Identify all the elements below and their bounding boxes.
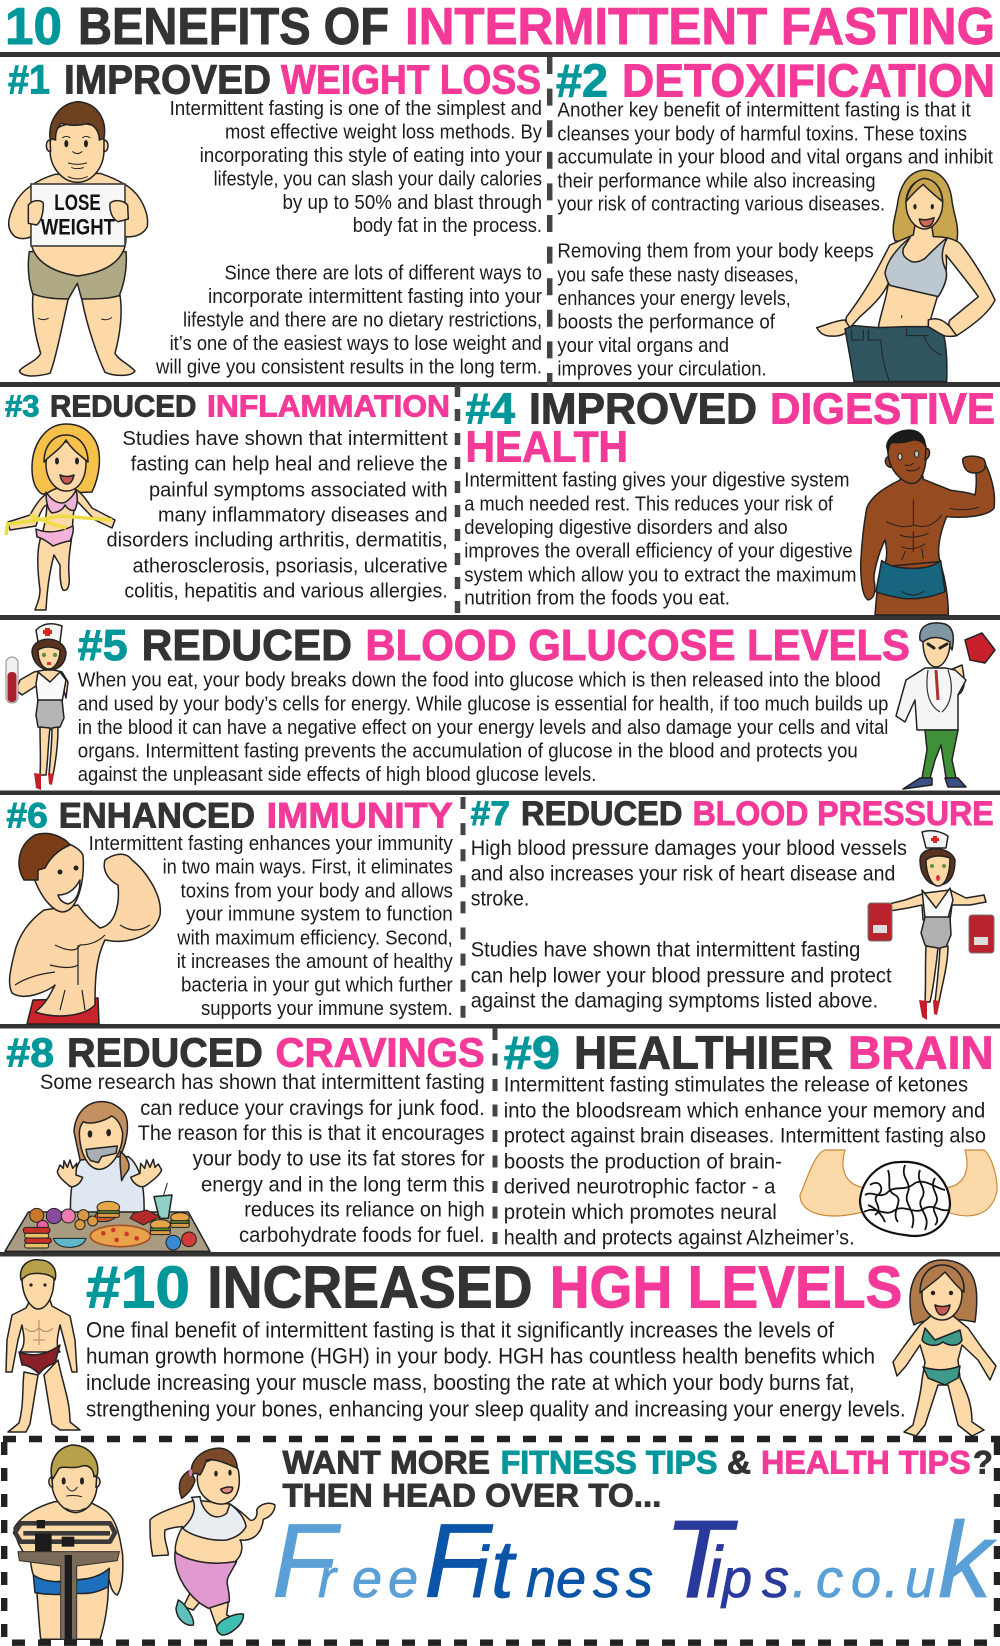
text block: #4 body: a much needed rest. This reduces your risk of: [464, 493, 833, 515]
section rules and dividers: [0, 52, 1000, 1256]
heading: #9: BRAIN: [848, 1026, 994, 1078]
text block: #1 body: lifestyle and there are no dietary restrictions,: [183, 310, 542, 332]
logo: FreeFitnessTips.co.uk: ree: [318, 1549, 418, 1609]
icon: man holding lose weight sign: [9, 102, 148, 376]
text block: #10 body: One final benefit of intermittent fasting is that it significantly increases the levels of: [86, 1317, 835, 1342]
heading: #1: #1: [8, 56, 50, 102]
panel: #9 healthier brain: [504, 1026, 997, 1249]
text block: #9 body: boosts the production of brain-: [504, 1150, 782, 1173]
text block: #8 body: can reduce your cravings for junk food.: [140, 1097, 485, 1120]
text block: #9 body: derived neurotrophic factor - a: [504, 1176, 776, 1199]
logo: FreeFitnessTips.co.uk: .co.u: [792, 1549, 935, 1609]
text block: #3 body: Studies have shown that intermittent: [122, 427, 448, 450]
heading: #1: IMPROVED: [64, 56, 271, 102]
heading: #7: #7: [471, 795, 510, 833]
icon: overweight woman jogging: [150, 1448, 275, 1635]
text block: #2 body: you safe these nasty diseases,: [557, 264, 798, 286]
heading: call to action: THEN HEAD OVER TO...: [282, 1478, 661, 1514]
logo: FreeFitnessTips.co.uk: ps: [720, 1549, 789, 1609]
heading: #3: [5, 389, 450, 424]
text block: #8 body: Some research has shown that intermittent fasting: [40, 1071, 485, 1094]
heading: #6: #6: [6, 796, 48, 835]
text block: #2 body: cleanses your body of harmful toxins. These toxins: [557, 123, 967, 145]
text block: #9 body: [504, 1074, 986, 1249]
text block: #3 body: many inflammatory diseases and: [158, 504, 448, 527]
text block: #8 body: energy and in the long term this: [201, 1173, 485, 1196]
text block: #1 body: Intermittent fasting is one of the simplest and: [170, 98, 542, 120]
heading: #9: HEALTHIER: [574, 1026, 833, 1078]
logo: FreeFitnessTips.co.uk: F: [424, 1503, 494, 1620]
text block: #3 body: colitis, hepatitis and various allergies.: [124, 580, 448, 603]
text block: #6 body: bacteria in your gut which further: [181, 974, 453, 996]
heading: #8: #8: [6, 1030, 54, 1076]
heading: #8: CRAVINGS: [276, 1030, 485, 1076]
text block: #2 body: Removing them from your body keeps: [557, 241, 874, 263]
text block: #7 body: Studies have shown that intermittent fasting: [471, 939, 860, 962]
text block: #8 body: carbohydrate foods for fuel.: [239, 1224, 485, 1247]
icon: woman in teal bikini: [893, 1260, 996, 1436]
text block: #10 body: include increasing your muscle mass, boosting the rate at which your body burns fat,: [86, 1370, 855, 1395]
logo: FreeFitnessTips.co.uk: k: [938, 1499, 997, 1620]
heading: #7: REDUCED: [521, 795, 682, 833]
heading: #5: #5: [78, 621, 128, 670]
title: [5, 0, 995, 56]
heading: #8: [6, 1030, 485, 1076]
icon: fit man in red briefs: [6, 1260, 80, 1432]
text block: #9 body: Intermittent fasting stimulates the release of ketones: [504, 1074, 968, 1097]
text block: #8 body: reduces its reliance on high: [244, 1199, 485, 1222]
heading: #1: WEIGHT LOSS: [281, 56, 541, 102]
heading: call to action: HEALTH TIPS: [761, 1444, 971, 1480]
heading: #4: DIGESTIVE: [770, 384, 995, 433]
icon: blonde woman measuring waist: [6, 424, 115, 610]
heading: #9: #9: [504, 1026, 560, 1078]
heading: call to action: [282, 1444, 993, 1514]
text block: #8 body: The reason for this is that it encourages: [138, 1122, 485, 1145]
text block: #3 body: fasting can help heal and relieve the: [131, 453, 448, 476]
text block: #6 body: your immune system to function: [186, 904, 453, 926]
heading: #8: REDUCED: [67, 1030, 263, 1076]
panel: #1 improved weight loss: [8, 56, 542, 378]
text block: #3 body: atherosclerosis, psoriasis, ulcerative: [133, 554, 448, 577]
heading: #2: #2: [556, 55, 608, 107]
logo: FreeFitnessTips.co.uk: i: [472, 1533, 490, 1613]
text block: #5 body: When you eat, your body breaks down the food into glucose which is then released into the blood: [78, 669, 881, 692]
text block: #2 body: Another key benefit of intermittent fasting is that it: [557, 100, 971, 122]
heading: #6: ENHANCED: [59, 796, 255, 835]
text block: #6 body: supports your immune system.: [201, 998, 453, 1020]
text block: #9 body: protein which promotes neural: [504, 1201, 777, 1224]
heading: #10: INCREASED: [207, 1254, 533, 1320]
text block: #10 body: [86, 1317, 906, 1421]
text block: #4 body: [464, 470, 856, 610]
logo: FreeFitnessTips.co.uk: T: [664, 1498, 738, 1621]
text block: #1 body: body fat in the process.: [353, 215, 542, 237]
text block: #5 body: [78, 669, 888, 786]
text block: #9 body: health and protects against Alzheimer’s.: [504, 1226, 855, 1249]
text block: #5 body: organs. Intermittent fasting prevents the accumulation of glucose in the blood and protects you: [78, 739, 858, 762]
text block: #9 body: into the bloodsream which enhance your memory and: [504, 1099, 985, 1122]
text block: #1 body: [155, 98, 542, 378]
heading: #6: IMMUNITY: [267, 796, 453, 835]
heading: #7: [471, 795, 994, 833]
callout: dashed footer box: [3, 1439, 1000, 1643]
text block: #3 body: painful symptoms associated with: [149, 478, 448, 501]
icon: brain with muscular arms: [800, 1150, 997, 1236]
text block: #6 body: toxins from your body and allows: [180, 880, 453, 902]
text block: #6 body: with maximum efficiency. Second,: [176, 927, 453, 949]
panel: #7 reduced blood pressure: [471, 795, 994, 1020]
text block: #6 body: [89, 833, 453, 1020]
text block: #4 body: nutrition from the foods you eat.: [464, 588, 730, 610]
icon: nurse holding blood bags: [868, 831, 994, 1020]
heading: #2: DETOXIFICATION: [622, 55, 995, 107]
text block: #4 body: system which allow you to extract the maximum: [464, 564, 856, 586]
icon: woman with taped mouth and junk food table: [5, 1102, 210, 1251]
text block: #1 body: incorporating this style of eating into your: [200, 145, 542, 167]
text block: #5 body: in the blood it can have a negative effect on your energy levels and also damage your cells and vital: [78, 716, 888, 739]
text block: #2 body: their performance while also increasing: [557, 170, 876, 192]
icon: slim woman in oversized jeans: [817, 170, 995, 382]
text block: #2 body: improves your circulation.: [557, 358, 767, 380]
heading: #5: REDUCED: [142, 621, 352, 670]
text block: #1 body: by up to 50% and blast through: [282, 192, 542, 214]
text block: #2 body: your vital organs and: [557, 335, 729, 357]
heading: #5: BLOOD GLUCOSE LEVELS: [365, 621, 910, 670]
text block: #6 body: Intermittent fasting enhances your immunity: [89, 833, 453, 855]
icon: nurse with test tube: [6, 624, 68, 790]
panel: #5 reduced blood glucose levels: [6, 621, 995, 790]
text block: #6 body: in two main ways. First, it eliminates: [163, 857, 453, 879]
panel: #10 increased hgh levels: [6, 1254, 996, 1436]
heading: #1: [8, 56, 541, 102]
text block: #7 body: against the damaging symptoms listed above.: [471, 990, 878, 1013]
text block: #7 body: can help lower your blood pressure and protect: [471, 964, 892, 987]
text block: #1 body: most effective weight loss methods. By: [225, 121, 542, 143]
text block: #8 body: your body to use its fat stores for: [193, 1148, 485, 1171]
panel: #4 improved digestive health: [464, 384, 995, 615]
heading: call to action: ?: [973, 1444, 993, 1480]
heading: #4: HEALTH: [466, 423, 628, 472]
text block: #7 body: [471, 837, 907, 1013]
heading: #4: [466, 384, 995, 472]
text block: #1 body: it’s one of the easiest ways to lose weight and: [170, 333, 542, 355]
text block: #8 body: [40, 1071, 485, 1247]
text block: #1 body: lifestyle, you can slash your daily calories: [214, 168, 542, 190]
icon: overweight man on scale: [14, 1445, 123, 1639]
text block: #6 body: it increases the amount of healthy: [177, 951, 453, 973]
heading: call to action: WANT MORE: [282, 1444, 490, 1480]
text block: #2 body: boosts the performance of: [557, 311, 775, 333]
logo: FreeFitnessTips.co.uk: t: [491, 1524, 517, 1615]
panel: #6 enhanced immunity: [6, 796, 453, 1024]
icon: doctor with blood bag: [896, 623, 995, 789]
icon: muscular man flexing: [861, 429, 994, 615]
text block: #1 body: Since there are lots of different ways to: [224, 262, 542, 284]
sign text: weight: WEIGHT: [41, 214, 115, 239]
text block: #1 body: incorporate intermittent fasting into your: [208, 286, 542, 308]
icon: cartoon muscle man flexing: [10, 833, 160, 1024]
panel: #2 detoxification: [556, 55, 995, 382]
text block: #7 body: stroke.: [471, 888, 529, 911]
heading: #3: #3: [5, 389, 40, 424]
text block: #2 body: enhances your energy levels,: [557, 288, 791, 310]
heading: #9: [504, 1026, 994, 1078]
text block: #3 body: disorders including arthritis, dermatitis,: [106, 529, 448, 552]
panel: #8 reduced cravings: [5, 1030, 485, 1251]
text block: #4 body: developing digestive disorders and also: [464, 517, 788, 539]
heading: call to action: FITNESS TIPS: [501, 1444, 718, 1480]
heading: #5: [78, 621, 910, 670]
text block: #4 body: Intermittent fasting gives your digestive system: [464, 470, 850, 492]
heading: #10: HGH LEVELS: [550, 1254, 902, 1320]
text block: #10 body: human growth hormone (HGH) in your body. HGH has countless health benefits which: [86, 1344, 875, 1369]
heading: #10: #10: [86, 1254, 190, 1320]
panel: #3 reduced inflammation: [5, 389, 450, 610]
heading: #3: REDUCED: [50, 389, 196, 424]
text block: #5 body: and used by your body’s cells for energy. While glucose is essential for health, if too much builds up: [78, 692, 888, 715]
text block: #5 body: against the unpleasant side effects of high blood glucose levels.: [78, 763, 596, 786]
sign text: lose: LOSE: [54, 190, 101, 215]
text block: #2 body: [557, 100, 993, 380]
text block: #7 body: and also increases your risk of heart disease and: [471, 862, 895, 885]
logo: FreeFitnessTips.co.uk: i: [706, 1533, 724, 1613]
text block: #10 body: strengthening your bones, enhancing your sleep quality and increasing your energy levels.: [86, 1396, 906, 1421]
text block: #3 body: [106, 427, 448, 603]
heading: #4: IMPROVED: [529, 384, 757, 433]
text block: #4 body: improves the overall efficiency of your digestive: [464, 541, 853, 563]
text block: #9 body: protect against brain diseases. Intermittent fasting also: [504, 1125, 986, 1148]
text block: #7 body: High blood pressure damages your blood vessels: [471, 837, 907, 860]
heading: #6: [6, 796, 453, 835]
logo: FreeFitnessTips.co.uk: F: [272, 1503, 342, 1620]
heading: call to action: &: [727, 1444, 751, 1480]
text block: #1 body: will give you consistent results in the long term.: [155, 356, 542, 378]
logo: FreeFitnessTips.co.uk: ness: [526, 1549, 653, 1609]
heading: #10: [86, 1254, 902, 1320]
text block: #2 body: your risk of contracting various diseases.: [557, 194, 885, 216]
heading: #4: #4: [466, 384, 516, 433]
heading: #3: INFLAMMATION: [207, 389, 450, 424]
